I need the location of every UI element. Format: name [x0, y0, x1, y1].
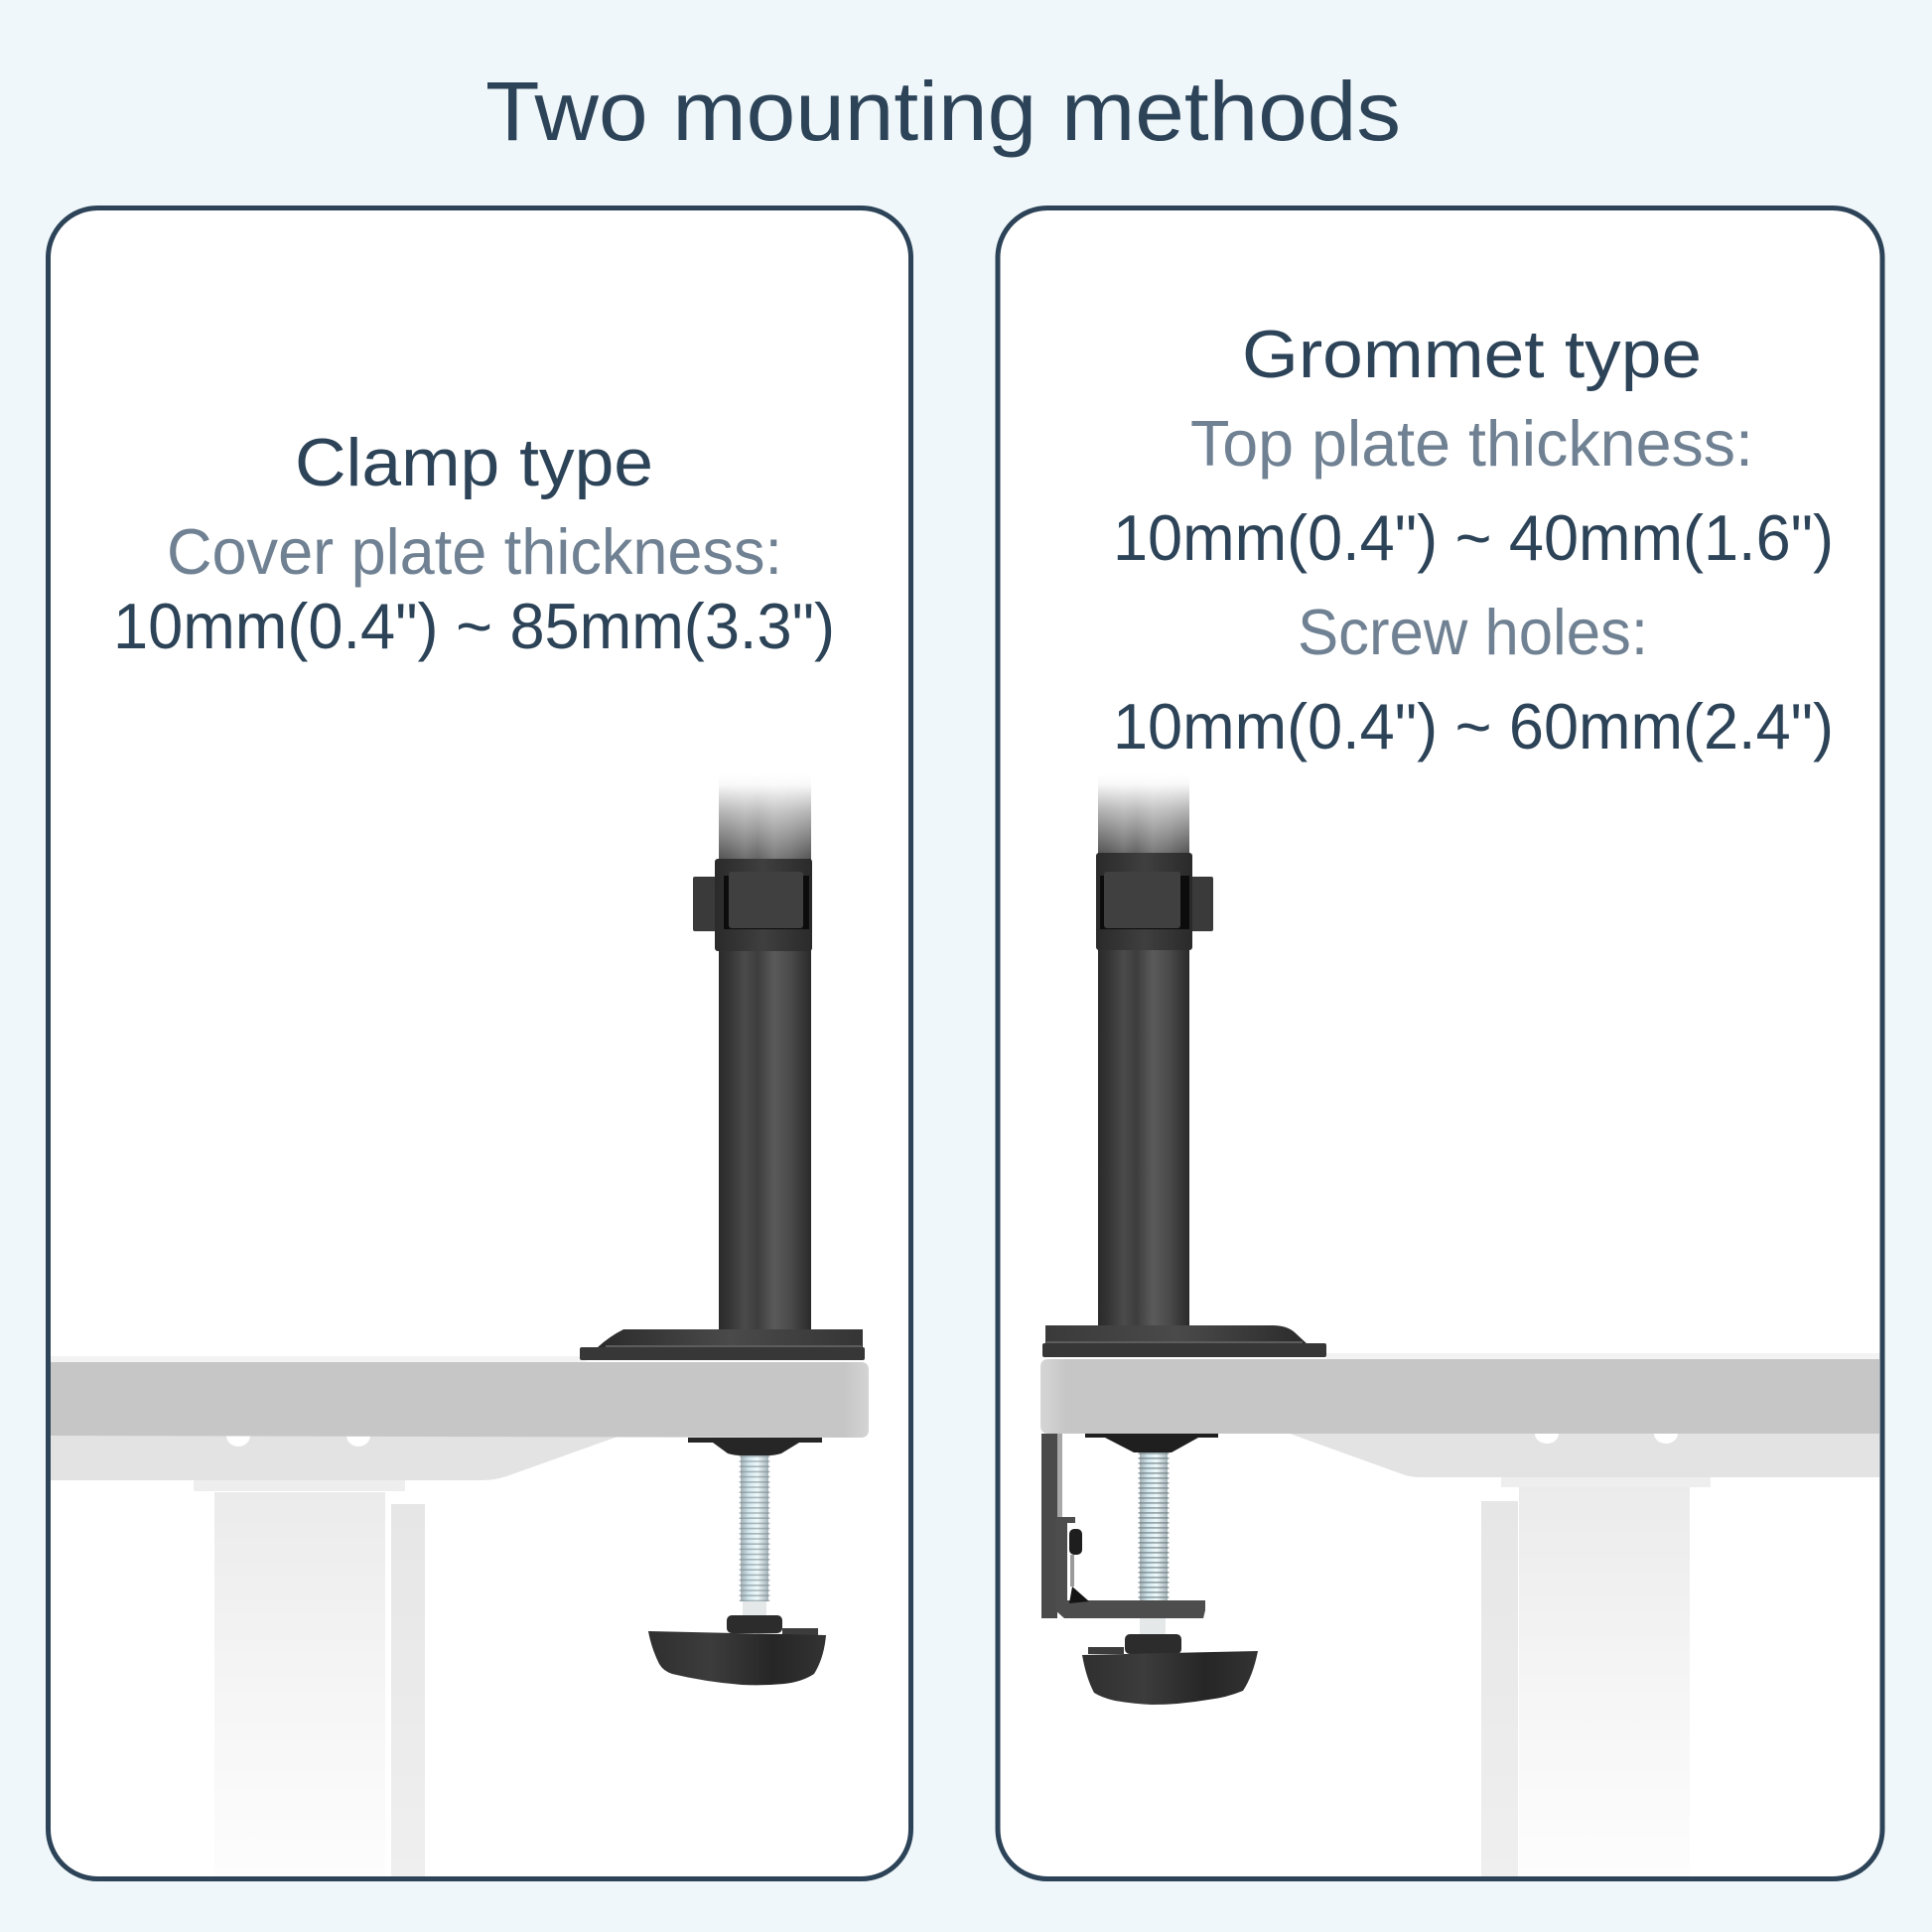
text: top plate thickness range: 10mm(0.4") ~ 40mm(1.6"): [1113, 501, 1834, 574]
desk leg: clamp side: [51, 1436, 621, 1876]
heading: clamp type: Clamp type: [295, 425, 653, 500]
clamp plate: clamp side: [580, 1329, 865, 1360]
panel border: clamp side: [48, 208, 911, 1878]
text: cover plate thickness label: Cover plate thickness:: [167, 515, 782, 588]
desk leg: grommet side: [1290, 1434, 1879, 1876]
clamp plate: grommet side: [1042, 1325, 1326, 1357]
panel: clamp type: [48, 208, 911, 1878]
text: cover plate thickness range: 10mm(0.4") ~ 85mm(3.3"): [113, 590, 835, 662]
panel border: grommet side: [998, 208, 1882, 1878]
title: Two mounting methods: [485, 65, 1401, 158]
c-bracket, screw and knob: grommet side: [1041, 1434, 1258, 1705]
heading: grommet type: Grommet type: [1242, 317, 1702, 392]
desk top: grommet side: [1040, 1353, 1880, 1434]
pole: grommet side: [1096, 774, 1213, 1326]
desk top: clamp side: [51, 1356, 869, 1438]
text: screw holes range: 10mm(0.4") ~ 60mm(2.4"): [1113, 690, 1834, 762]
panel: grommet type: [998, 208, 1882, 1878]
pole: clamp side: [693, 774, 812, 1330]
text: top plate thickness label: Top plate thickness:: [1190, 407, 1753, 480]
text: screw holes label: Screw holes:: [1298, 596, 1648, 668]
screw and knob: clamp side: [648, 1438, 826, 1685]
